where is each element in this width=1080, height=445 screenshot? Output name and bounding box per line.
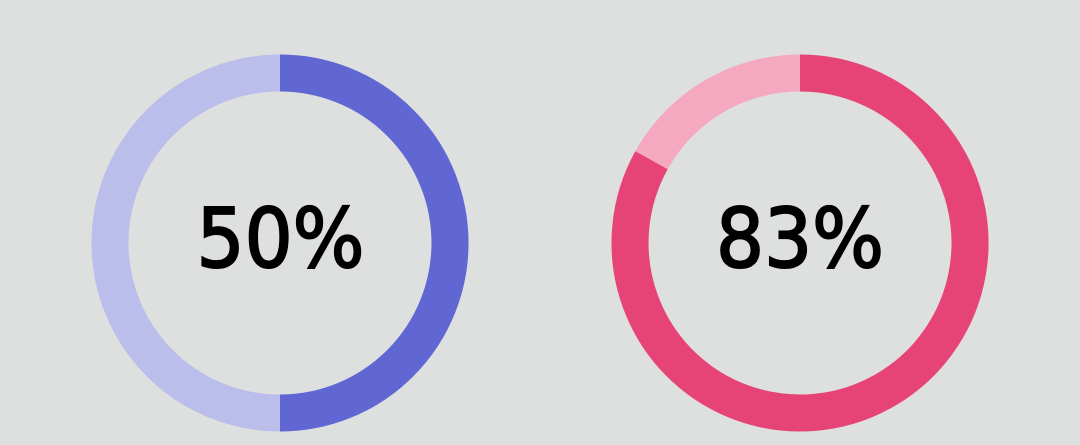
donut arc: 50% value xyxy=(280,73,450,413)
donut arc: 83% value xyxy=(630,73,970,413)
donut chart: 83% xyxy=(630,73,970,413)
label: 50%: 50% xyxy=(196,192,364,287)
donut track: remaining 50% xyxy=(110,73,450,413)
donut track: remaining 17% xyxy=(630,73,970,413)
donut chart: 50% xyxy=(110,73,450,413)
label: 83%: 83% xyxy=(716,192,884,287)
